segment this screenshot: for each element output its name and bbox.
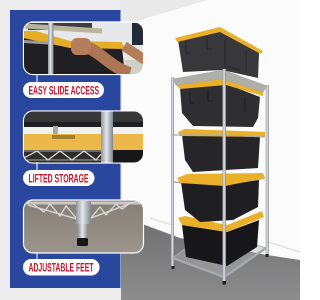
feet xyxy=(172,254,268,284)
bin 2 xyxy=(176,79,263,127)
label pill: easy slide access xyxy=(23,82,104,98)
label pill: adjustable feet xyxy=(23,259,100,276)
photo: easy slide access xyxy=(23,22,145,75)
connector 1 xyxy=(36,74,38,83)
connector 3 xyxy=(36,252,38,260)
photo: adjustable feet xyxy=(24,200,144,253)
connector 2 xyxy=(36,162,38,171)
shelf 4 xyxy=(173,178,265,186)
storage rack with bins xyxy=(171,27,269,284)
bin 3 xyxy=(178,129,265,172)
label pill: adjustable feet: ADJUSTABLE FEET xyxy=(28,260,94,274)
label pill: lifted storage xyxy=(23,170,94,186)
label pill: easy slide access: EASY SLIDE ACCESS xyxy=(28,83,99,97)
bin 5 xyxy=(178,211,264,266)
bin 1 xyxy=(175,27,263,78)
photo: lifted storage xyxy=(24,111,144,163)
front upright xyxy=(222,69,226,282)
panel: blue backing xyxy=(10,10,120,288)
bottom wire shelf xyxy=(173,240,266,277)
shelf 2 xyxy=(173,70,267,92)
rear uprights xyxy=(171,77,269,267)
shelf 3 xyxy=(172,135,265,137)
bin 4 xyxy=(177,173,265,222)
label pill: lifted storage: LIFTED STORAGE xyxy=(28,171,89,185)
